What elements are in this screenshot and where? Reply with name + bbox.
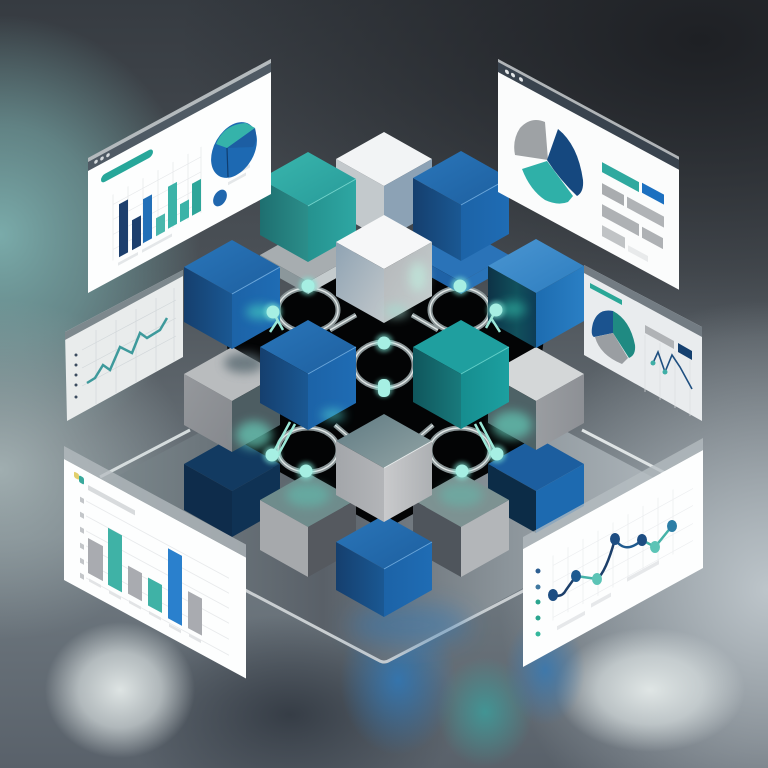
cube: right silver	[488, 347, 584, 450]
cube: right sky blue	[488, 239, 584, 348]
cube: lower right silver	[413, 473, 509, 577]
cube: hidden blue under top right	[413, 228, 509, 294]
pie chart: top right dashboard	[514, 120, 583, 204]
pie chart	[592, 310, 635, 364]
cube: hidden gray under teal	[260, 228, 356, 294]
cube: center white	[336, 215, 432, 323]
network rings	[278, 288, 490, 472]
glass platform	[78, 335, 690, 664]
title pill	[590, 283, 622, 305]
info blocks	[602, 161, 664, 271]
cube: middle right teal	[413, 320, 509, 429]
cube: top left teal	[260, 152, 356, 262]
panel: top right dashboard	[498, 59, 679, 290]
dark core behind cubes	[225, 235, 545, 530]
cube: top right blue	[413, 151, 509, 261]
cube: left silver	[184, 347, 280, 452]
line series	[653, 352, 692, 389]
cube: lower left dark blue	[184, 437, 280, 537]
panel: bottom left dashboard	[64, 446, 246, 678]
cube: top back white	[336, 132, 432, 240]
cube: lower left silver	[260, 473, 356, 577]
bar chart	[88, 505, 202, 637]
panel: top left dashboard	[88, 59, 271, 293]
cube: middle left blue	[260, 320, 356, 430]
cube: center steel	[336, 414, 432, 522]
bar chart	[119, 160, 201, 257]
panel: bottom right dashboard	[523, 438, 703, 667]
title pill	[101, 148, 153, 184]
network nodes	[263, 277, 506, 480]
panel: right small dashboard	[584, 265, 702, 421]
line series	[87, 318, 167, 383]
cube: left blue	[184, 240, 280, 349]
panel: left small line chart	[65, 270, 183, 421]
header marks	[74, 471, 135, 515]
cube: lower right blue	[488, 437, 584, 533]
cube: bottom blue	[336, 515, 432, 617]
pie chart: top left dashboard	[202, 114, 266, 209]
line chart: bottom right dashboard	[536, 520, 677, 636]
